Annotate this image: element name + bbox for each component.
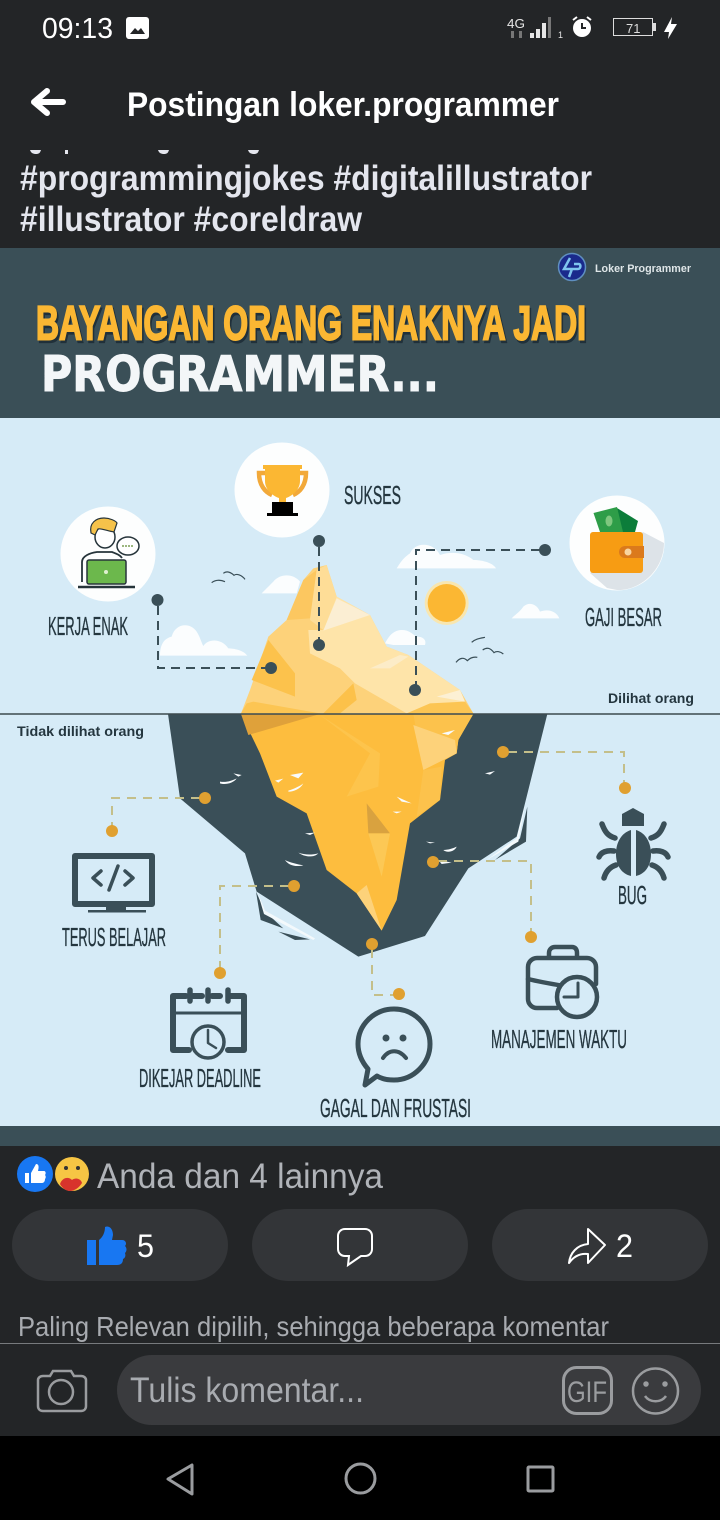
caption hashtags: #illustrator #coreldraw bbox=[20, 200, 363, 239]
icon: smiley bbox=[633, 1368, 678, 1414]
label: kerja enak: KERJA ENAK bbox=[48, 611, 128, 641]
label: sukses: SUKSES bbox=[344, 480, 401, 510]
label: gagal dan frustasi: GAGAL DAN FRUSTASI bbox=[320, 1093, 471, 1123]
connector: sukses bbox=[313, 535, 325, 651]
sky and sea panel bbox=[0, 418, 720, 1126]
footer band bbox=[0, 1126, 720, 1146]
connector: dikejar deadline bbox=[214, 880, 300, 979]
connector: manajemen waktu bbox=[427, 856, 537, 943]
icon: nav home bbox=[346, 1464, 375, 1493]
comment button bbox=[252, 1209, 468, 1281]
text: DIKEJAR DEADLINE bbox=[139, 1063, 261, 1093]
icon: sun bbox=[425, 581, 469, 625]
caption hashtags bbox=[20, 159, 592, 239]
icon: battery: 71 bbox=[626, 21, 640, 36]
icon: gif: GIF bbox=[567, 1376, 607, 1409]
icon: gallery notification bbox=[126, 17, 149, 39]
icon: trophy bbox=[234, 442, 330, 538]
connector: bug bbox=[497, 746, 631, 794]
icon: like reaction bbox=[17, 1156, 53, 1192]
icon: monitor bbox=[75, 856, 152, 912]
reaction count: Anda dan 4 lainnya bbox=[97, 1157, 384, 1196]
icon: back arrow bbox=[34, 91, 63, 113]
label: bug: BUG bbox=[618, 880, 647, 910]
clipped caption line bbox=[30, 150, 259, 154]
label: Tidak dilihat orang: Tidak dilihat orang bbox=[17, 723, 144, 739]
icon: alarm bbox=[573, 17, 591, 37]
connector: gaji besar bbox=[409, 544, 551, 696]
icon: bug bbox=[599, 808, 668, 878]
clouds bbox=[160, 545, 559, 656]
connector: kerja enak bbox=[152, 594, 277, 674]
deep hull bbox=[168, 714, 547, 957]
reactions bbox=[17, 1156, 384, 1196]
share button bbox=[492, 1209, 708, 1281]
icon: network signal: 1 bbox=[558, 30, 563, 40]
comment sort notice: Paling Relevan dipilih, sehingga beberapa komentar bbox=[18, 1311, 609, 1342]
navigation bar bbox=[0, 1436, 720, 1520]
icon: camera bbox=[38, 1371, 86, 1411]
icon: nav back bbox=[168, 1465, 192, 1494]
like button bbox=[12, 1209, 228, 1281]
icon: battery bbox=[614, 18, 656, 36]
page title: Postingan loker.programmer bbox=[127, 86, 559, 124]
iceberg under water bbox=[241, 714, 473, 931]
brand name: Loker Programmer bbox=[595, 263, 692, 275]
waterline bbox=[0, 713, 720, 715]
comment input: Tulis komentar... bbox=[130, 1371, 364, 1410]
status bar bbox=[42, 13, 677, 45]
icon: care reaction bbox=[55, 1157, 89, 1191]
composer background bbox=[0, 1343, 720, 1436]
connector: terus belajar bbox=[106, 792, 211, 837]
comment input bbox=[117, 1355, 701, 1425]
icon: calendar with clock bbox=[173, 990, 244, 1058]
ice shards bbox=[256, 807, 527, 940]
icon: briefcase with clock bbox=[528, 947, 597, 1017]
icon: network signal: 4G bbox=[507, 16, 525, 31]
icon: charging bolt bbox=[664, 17, 677, 39]
icon: wallet bbox=[570, 496, 664, 590]
clock time: 09:13 bbox=[42, 13, 113, 45]
infographic header band bbox=[0, 248, 720, 418]
iceberg scene bbox=[160, 545, 559, 957]
like button: 5 bbox=[137, 1228, 154, 1264]
birds bbox=[212, 572, 503, 662]
waves bbox=[220, 730, 495, 866]
icon: sad face bubble bbox=[358, 1009, 430, 1085]
shard highlights bbox=[257, 805, 525, 940]
icon: gif bbox=[564, 1368, 612, 1414]
icon: programmer bbox=[60, 506, 156, 602]
logo bbox=[558, 254, 586, 280]
connector: gagal bbox=[366, 938, 405, 1000]
caption hashtags: #programmingjokes #digitalillustrator bbox=[20, 159, 592, 198]
text: TERUS BELAJAR bbox=[62, 922, 166, 952]
iceberg above water bbox=[241, 565, 473, 713]
share button: 2 bbox=[616, 1228, 633, 1264]
icon: network signal bbox=[507, 16, 563, 40]
headline line 2: PROGRAMMER... bbox=[41, 346, 439, 403]
label: Dilihat orang: Dilihat orang bbox=[608, 690, 694, 706]
icon: nav recents bbox=[528, 1467, 553, 1491]
